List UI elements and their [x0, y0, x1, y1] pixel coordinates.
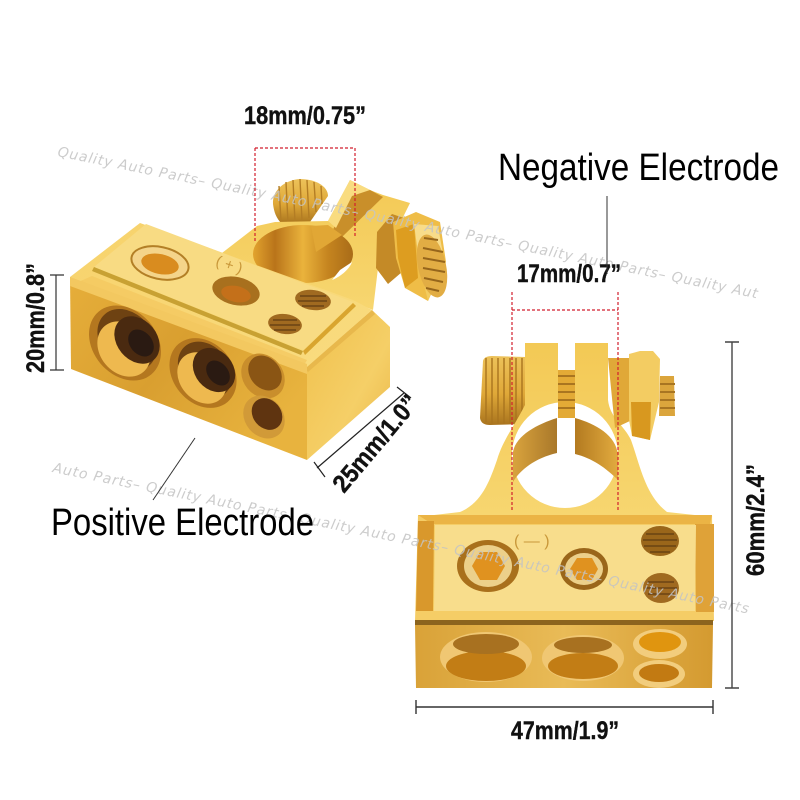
- clamp bore: [512, 402, 618, 508]
- watermark: Quality Auto Parts– Quality Auto Parts– Quality Auto Parts– Quality Auto Parts– Quality Aut: [56, 144, 760, 302]
- cable holes: [440, 629, 687, 688]
- dimension: 20mm height: [22, 263, 64, 373]
- watermark: [50, 144, 760, 617]
- clamp slot: [332, 186, 383, 237]
- polarity mark: ( — ): [514, 533, 550, 550]
- polarity mark: ( + ): [214, 253, 245, 277]
- dimension: 60mm height: 60mm/2.4”: [742, 464, 770, 576]
- label: positive electrode: Positive Electrode: [51, 502, 314, 544]
- label: positive electrode: [51, 438, 314, 544]
- top face: [70, 223, 372, 367]
- front face: [70, 277, 307, 460]
- side face: [307, 310, 390, 460]
- dimension: 17mm clamp width: 17mm/0.7”: [517, 260, 621, 288]
- clamp bore: [253, 225, 353, 283]
- nut stack: [608, 351, 675, 440]
- top plate: [415, 515, 714, 621]
- dimension: 18mm top width: 18mm/0.75”: [244, 102, 366, 130]
- knurled knob: [273, 179, 328, 224]
- slot and threaded rod: [558, 342, 575, 456]
- knob: [480, 356, 526, 425]
- dimension: 47mm width: [416, 700, 713, 745]
- cable holes: [74, 291, 294, 447]
- bolts: [457, 526, 679, 603]
- clamp walls: [513, 418, 557, 482]
- dimension: 17mm clamp width: [512, 260, 621, 512]
- dimension: 20mm height: 20mm/0.8”: [22, 263, 50, 373]
- watermark: Auto Parts– Quality Auto Parts– Quality Auto Parts– Quality Auto Parts– Quality Auto Parts: [50, 460, 750, 617]
- clamp body: [222, 180, 410, 310]
- top bolts: [128, 241, 332, 336]
- dimension: 60mm height: [725, 342, 770, 688]
- dimension: 18mm top width: [244, 102, 366, 243]
- positive terminal photo: [70, 179, 452, 460]
- dimension: 47mm width: 47mm/1.9”: [511, 717, 619, 745]
- nut and bolt: [376, 212, 452, 301]
- front face: [415, 625, 713, 688]
- clamp body: [417, 343, 713, 517]
- negative terminal photo: [415, 342, 714, 688]
- dimension: 25mm depth: 25mm/1.0”: [327, 389, 424, 498]
